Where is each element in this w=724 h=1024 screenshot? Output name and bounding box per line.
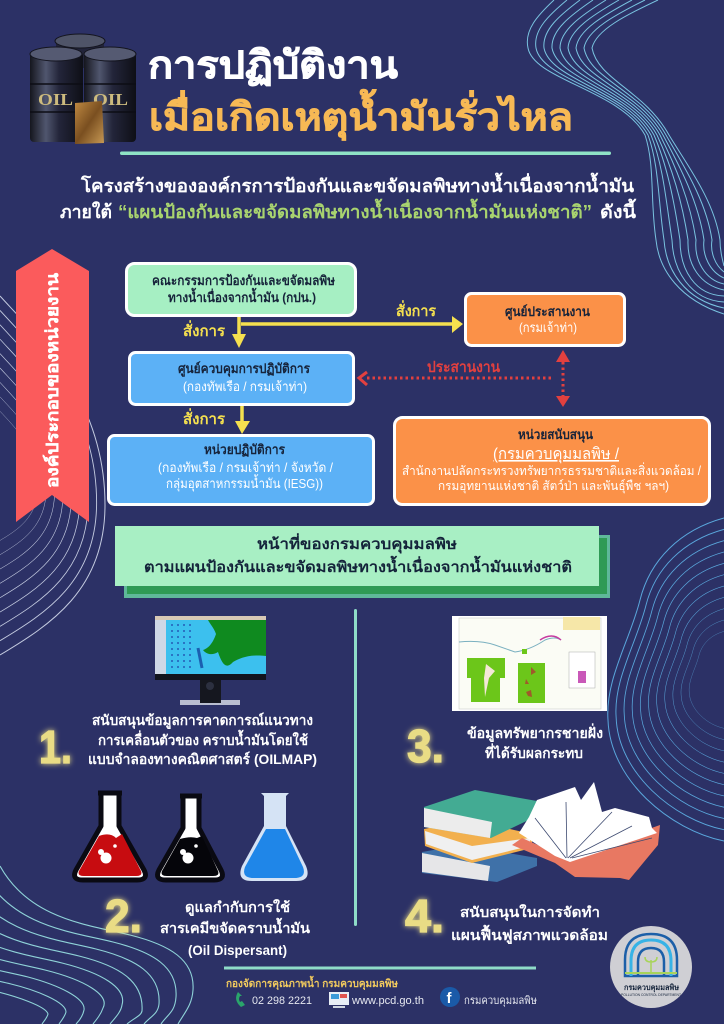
box: operating units: หน่วยปฏิบัติการ (204, 442, 285, 458)
decorative waves: bottom left (0, 866, 193, 1024)
subtitle: ดังนี้ (600, 198, 637, 222)
step 1 number: 1. (39, 721, 72, 773)
centre divider (354, 609, 357, 926)
banner: duties of the Pollution Control Department: หน้าที่ของกรมควบคุมมลพิษ (257, 533, 457, 554)
box: supporting units: (กรมควบคุมมลพิษ / (493, 446, 620, 464)
subtitle (60, 172, 637, 222)
title underline (120, 152, 611, 155)
map of affected coastal resources (452, 616, 607, 711)
icon: flask with red liquid (75, 793, 145, 880)
step 2 text (160, 898, 310, 958)
arrows: coordination links (359, 350, 570, 407)
footer rule (224, 966, 536, 970)
command labels: สั่งการ (183, 320, 226, 340)
arrows: command lines (232, 316, 463, 434)
step 4 text: แผนฟื้นฟูสภาพแวดล้อม (451, 924, 608, 944)
ribbon: composition of agencies: องค์ประกอบของหน่วยงาน (42, 273, 62, 488)
step 4 text: สนับสนุนในการจัดทำ (460, 903, 600, 921)
command labels (183, 300, 437, 428)
step 2 text: สารเคมีขจัดคราบน้ำมัน (160, 917, 310, 936)
subtitle: “แผนป้องกันและขจัดมลพิษทางน้ำเนื่องจากน้ำมันแห่งชาติ” (118, 198, 592, 222)
icon: oil barrels: OIL (93, 90, 128, 109)
footer phone: 02 298 2221 (252, 995, 312, 1007)
step 3 number: 3. (407, 720, 444, 772)
banner: duties of the Pollution Control Department (115, 526, 610, 598)
box: operating units: (กองทัพเรือ / กรมเจ้าท่า / จังหวัด / (158, 460, 333, 475)
box: committee (126, 264, 356, 316)
command labels: สั่งการ (183, 408, 226, 428)
box: coordination centre: (กรมเจ้าท่า) (519, 320, 577, 335)
subtitle: ภายใต้ (60, 201, 112, 222)
title: เมื่อเกิดเหตุน้ำมันรั่วไหล (149, 89, 573, 141)
box: supporting units: หน่วยสนับสนุน (518, 427, 593, 443)
footer website: www.pcd.go.th (351, 995, 424, 1007)
box: supporting units: สำนักงานปลัดกระทรวงทรัพยากรธรรมชาติและสิ่งแวดล้อม / (402, 462, 701, 478)
arrows: coordination links: ประสานงาน (427, 359, 501, 376)
box: supporting units (394, 418, 710, 504)
decorative waves: top right (527, 0, 724, 314)
step 1 text: แบบจำลองทางคณิตศาสตร์ (OILMAP) (88, 751, 317, 767)
box: committee: ทางน้ำเนื่องจากน้ำมัน (กปน.) (168, 287, 316, 305)
box: operations control centre: (กองทัพเรือ / กรมเจ้าท่า) (183, 379, 307, 394)
footer department name: กองจัดการคุณภาพน้ำ กรมควบคุมมลพิษ (226, 975, 398, 991)
icon: oil barrels (30, 34, 136, 144)
icon: flask with black liquid (158, 796, 222, 880)
footer facebook (440, 987, 537, 1007)
logo: Pollution Control Department: POLLUTION CONTROL DEPARTMENT (621, 992, 681, 997)
box: coordination centre (466, 294, 624, 346)
footer facebook: f (446, 990, 452, 1007)
title (148, 45, 573, 141)
decorative waves: right (608, 518, 724, 841)
logo: Pollution Control Department: กรมควบคุมมลพิษ (624, 983, 679, 992)
banner: duties of the Pollution Control Department: ตามแผนป้องกันและขจัดมลพิษทางน้ำเนื่องจากน้ำมันแห่งชาติ (144, 555, 572, 576)
step 4 number: 4. (405, 890, 444, 942)
step 3 text (467, 723, 603, 761)
box: operating units: กลุ่มอุตสาหกรรมน้ำมัน (IESG)) (166, 474, 323, 492)
step 1 text (88, 712, 317, 767)
logo: Pollution Control Department (610, 926, 692, 1008)
subtitle: โครงสร้างขององค์กรการป้องกันและขจัดมลพิษทางน้ำเนื่องจากน้ำมัน (80, 172, 635, 196)
step 2 text: ดูแลกำกับการใช้ (185, 898, 291, 916)
command labels: สั่งการ (396, 300, 437, 320)
icon: stack of books (422, 790, 537, 882)
footer phone (236, 992, 312, 1007)
box: coordination centre: ศูนย์ประสานงาน (505, 304, 590, 320)
footer facebook: กรมควบคุมมลพิษ (464, 995, 537, 1007)
icon: flask with blue liquid (240, 793, 308, 881)
title: การปฏิบัติงาน (148, 45, 398, 87)
box: supporting units: กรมอุทยานแห่งชาติ สัตว์ป่า และพันธุ์พืช ฯลฯ) (438, 479, 669, 494)
icon: oil barrels: OIL (38, 90, 73, 109)
step 4 text (451, 903, 608, 944)
step 2 number: 2. (105, 890, 142, 942)
icon: monitor with OILMAP screen (155, 616, 266, 705)
icon: open book (512, 782, 660, 880)
ribbon: composition of agencies (16, 249, 89, 522)
box: committee: คณะกรรมการป้องกันและขจัดมลพิษ (152, 273, 335, 288)
footer website (329, 992, 424, 1008)
step 3 text: ที่ได้รับผลกระทบ (485, 743, 583, 761)
box: operations control centre: ศูนย์ควบคุมการปฏิบัติการ (178, 361, 310, 377)
decorative waves: left (0, 296, 105, 655)
box: operating units (108, 436, 374, 504)
step 2 text: (Oil Dispersant) (188, 942, 287, 958)
step 1 text: การเคลื่อนตัวของ คราบน้ำมันโดยใช้ (98, 729, 308, 748)
step 1 text: สนับสนุนข้อมูลการคาดการณ์แนวทาง (92, 712, 313, 729)
box: operations control centre (130, 352, 354, 404)
step 3 text: ข้อมูลทรัพยากรชายฝั่ง (467, 723, 603, 742)
